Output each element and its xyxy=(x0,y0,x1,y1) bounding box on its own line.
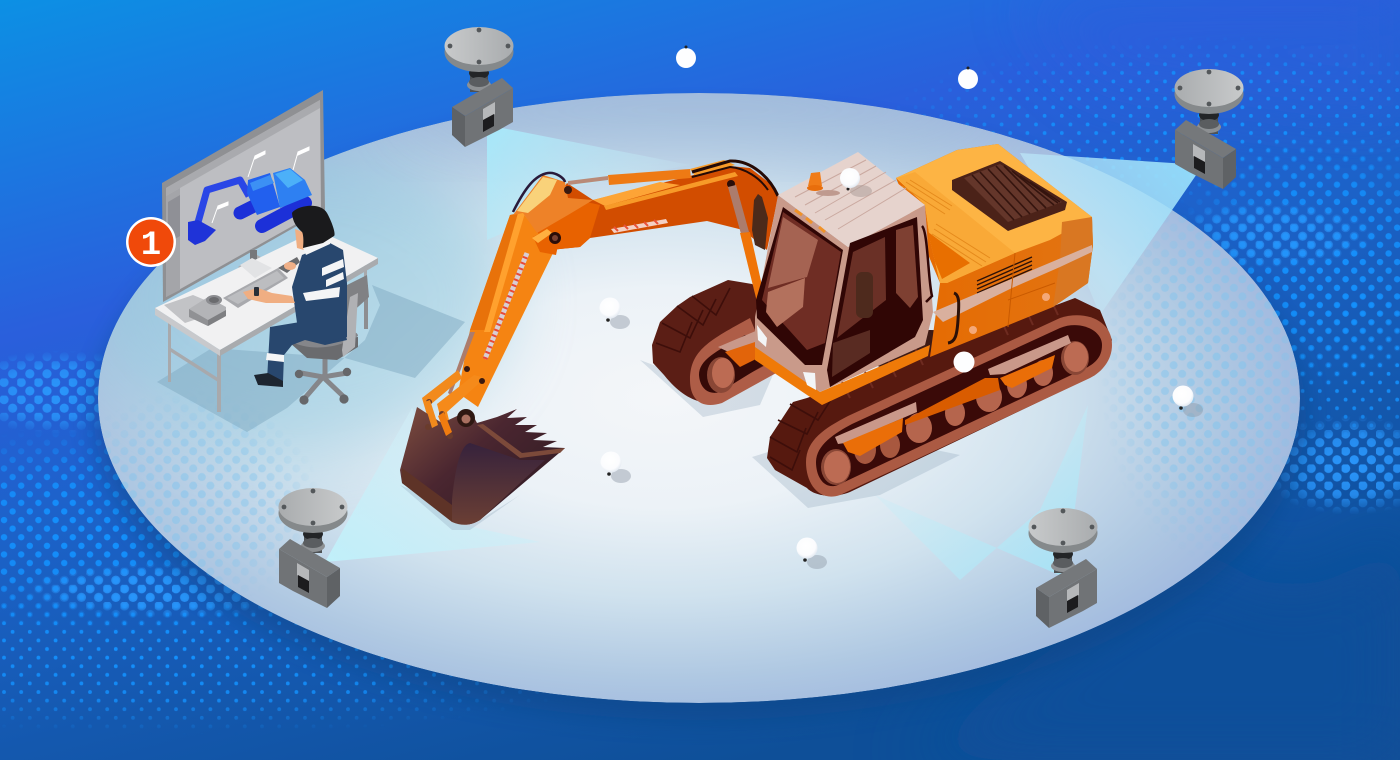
shadows under excavator xyxy=(400,360,960,530)
shadow: workstation xyxy=(157,285,465,432)
callout labels on screen xyxy=(212,147,309,223)
tracking marker xyxy=(600,298,630,329)
cab headlights xyxy=(757,325,767,347)
cone: right sensor xyxy=(1020,153,1203,315)
tracking marker xyxy=(676,46,696,68)
cone: top sensor xyxy=(487,125,690,240)
badge: step number 1 xyxy=(126,217,176,267)
cone: bottom sensor xyxy=(875,405,1088,580)
rear track xyxy=(652,280,780,405)
sensor: bottom xyxy=(1028,508,1098,628)
tracking marker on cab roof xyxy=(840,168,872,197)
side louvres and stripe xyxy=(977,257,1032,297)
sensor: left xyxy=(278,488,348,608)
tread rungs xyxy=(842,298,1058,398)
amber beacon xyxy=(807,172,840,196)
slew ring xyxy=(862,330,998,374)
monitor stand xyxy=(238,255,274,275)
workstation: desk, monitor and operator xyxy=(155,90,378,412)
bucket xyxy=(400,399,565,525)
operator cab xyxy=(755,152,933,405)
front track xyxy=(767,298,1112,497)
boom xyxy=(533,160,778,302)
ground ellipse xyxy=(90,70,1300,703)
shadow under ground ellipse xyxy=(94,112,1306,720)
upper body xyxy=(896,144,1093,357)
excavator xyxy=(400,144,1112,530)
tracking marker xyxy=(796,538,827,569)
tracking marker xyxy=(958,66,978,89)
operator xyxy=(243,206,347,387)
tracking marker xyxy=(1172,386,1203,417)
sensor: top xyxy=(444,27,514,147)
engine vents xyxy=(902,180,990,266)
light cones from sensors xyxy=(325,125,1203,580)
tracking marker on body xyxy=(954,352,974,372)
badge: step number 1: 1 xyxy=(141,227,161,265)
hazard stripe on arm xyxy=(485,253,527,359)
tread chevrons xyxy=(770,398,832,470)
tracking marker xyxy=(600,452,631,483)
keyboard and mouse xyxy=(223,257,300,308)
3D part on desk xyxy=(164,295,226,326)
engine hatch grille xyxy=(952,161,1067,231)
CAD excavator model on screen xyxy=(188,168,312,245)
office chair xyxy=(290,275,369,405)
cone: left sensor xyxy=(325,408,540,562)
side window xyxy=(827,217,923,387)
chair base xyxy=(301,355,347,399)
sensor: right xyxy=(1174,69,1244,189)
front windscreen xyxy=(756,207,843,365)
monitor xyxy=(162,90,325,302)
arm xyxy=(422,173,593,435)
door handle xyxy=(922,226,932,302)
desk xyxy=(155,230,378,412)
